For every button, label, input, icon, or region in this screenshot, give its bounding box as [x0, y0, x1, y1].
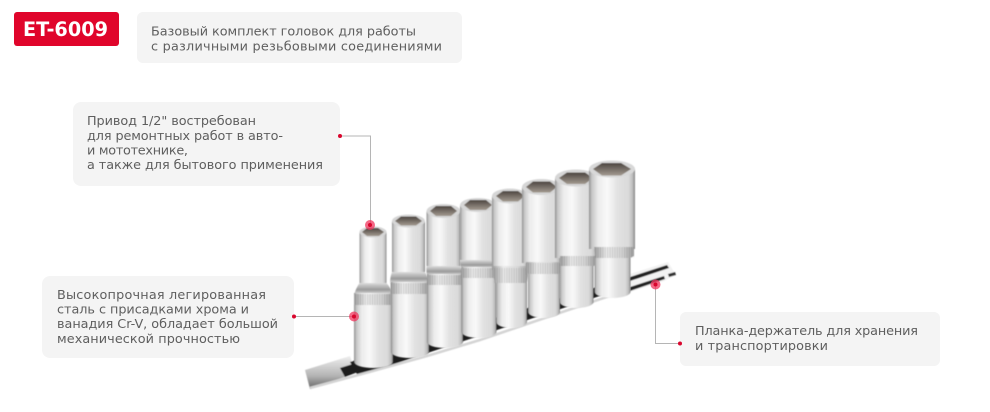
- socket 1: [354, 226, 393, 368]
- panel: alloy steel callout: [42, 276, 294, 358]
- socket 8: [589, 160, 635, 298]
- holder rail: [305, 262, 676, 389]
- connector: rail callout to rail: [650, 280, 682, 346]
- panel: holder rail callout: [680, 312, 940, 366]
- panel: 1/2 inch drive callout: а также для бытового применения: [87, 158, 323, 173]
- badge: model ET-6009: ET-6009: [23, 18, 108, 41]
- panel: set description: с различными резьбовыми соединениями: [151, 40, 442, 54]
- panel: set description: [137, 12, 462, 63]
- connector: drive callout to socket: [338, 134, 375, 230]
- socket 7: [555, 170, 597, 308]
- panel: 1/2 inch drive callout: Привод 1/2" востребован: [87, 114, 256, 129]
- socket 5: [492, 188, 528, 328]
- panel: 1/2 inch drive callout: для ремонтных работ в авто-: [87, 129, 283, 144]
- socket 2: [390, 214, 429, 358]
- panel: holder rail callout: и транспортировки: [695, 339, 828, 354]
- panel: 1/2 inch drive callout: и мототехнике,: [87, 144, 188, 158]
- connector: steel callout to socket: [292, 312, 359, 322]
- panel: holder rail callout: Планка-держатель для хранения: [695, 324, 918, 339]
- panel: set description: Базовый комплект головок для работы: [151, 24, 416, 40]
- socket 3: [426, 204, 463, 348]
- socket 4: [460, 198, 497, 338]
- panel: 1/2 inch drive callout: [73, 102, 340, 186]
- panel: alloy steel callout: ванадия Cr-V, обладает большой: [57, 317, 278, 332]
- socket 6: [522, 179, 561, 318]
- badge: model ET-6009: [14, 12, 119, 46]
- panel: alloy steel callout: механической прочностью: [57, 332, 240, 347]
- panel: alloy steel callout: сталь с присадками хрома и: [57, 302, 249, 318]
- panel: alloy steel callout: Высокопрочная легированная: [57, 288, 266, 303]
